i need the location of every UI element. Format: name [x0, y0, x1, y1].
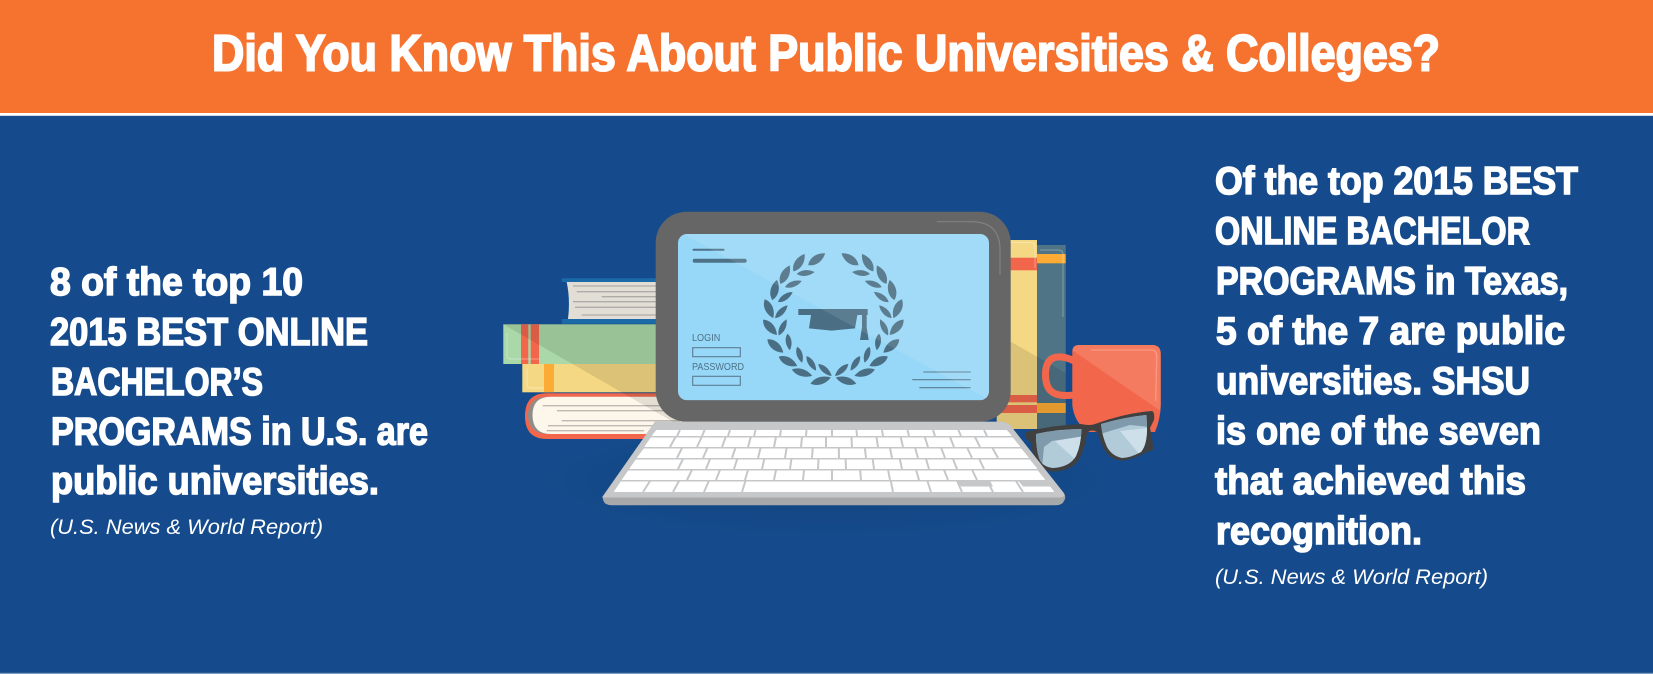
left text block: [50, 261, 428, 539]
right text block: 5 of the 7 are public: [1216, 310, 1565, 353]
yellow book: [522, 364, 722, 392]
right text block: recognition.: [1216, 510, 1422, 553]
right text block: Of the top 2015 BEST: [1215, 160, 1578, 203]
login form: PASSWORD: [692, 362, 744, 373]
bottom book with red cover: [525, 393, 720, 439]
green book: [503, 324, 723, 364]
right text block: is one of the seven: [1216, 410, 1541, 453]
icon: glasses: [1025, 411, 1154, 472]
left source note: (U.S. News & World Report): [50, 516, 323, 539]
login form: [692, 333, 744, 385]
left text block: BACHELOR’S: [51, 361, 263, 404]
login form: LOGIN: [692, 333, 720, 344]
laptop screen: [678, 234, 1000, 406]
keyboard shadow: [540, 422, 1120, 538]
keyboard key rows: [614, 430, 1054, 492]
right text block: PROGRAMS in Texas,: [1216, 260, 1568, 303]
right text block: [1215, 160, 1578, 589]
left text block: PROGRAMS in U.S. are: [51, 410, 428, 454]
top book with blue cover: [562, 278, 720, 324]
right text block: universities. SHSU: [1216, 360, 1530, 403]
icon: laptop monitor: [656, 212, 1011, 422]
mug handle: [1045, 357, 1074, 396]
icon: laurel wreath with graduation cap: [760, 250, 907, 387]
right text block: ONLINE BACHELOR: [1215, 210, 1530, 253]
graduation cap: [798, 309, 869, 340]
half-height arrow keys: [957, 480, 993, 486]
icon: upright books: [997, 240, 1066, 429]
left text block: 2015 BEST ONLINE: [50, 311, 368, 354]
title: Did You Know This About Public Universities & Colleges?: [212, 24, 1440, 82]
left text block: 8 of the top 10: [50, 261, 303, 304]
right source note: (U.S. News & World Report): [1215, 566, 1488, 589]
keyboard key gaps: [643, 430, 1023, 492]
upright slate book: [1037, 245, 1066, 429]
left text block: public universities.: [51, 460, 379, 503]
screen footer lines: [912, 372, 971, 388]
left lens: [1036, 429, 1082, 468]
right lens: [1101, 415, 1147, 458]
icon: coffee mug: [1045, 343, 1162, 435]
icon: stacked books: [503, 278, 725, 439]
right text block: that achieved this: [1215, 460, 1526, 503]
screen header lines: [694, 249, 724, 251]
illustration: laptop, books, mug and glasses: [503, 212, 1162, 538]
icon: keyboard: [602, 422, 1065, 505]
header band: [0, 0, 1653, 116]
upright yellow book: [997, 240, 1037, 429]
